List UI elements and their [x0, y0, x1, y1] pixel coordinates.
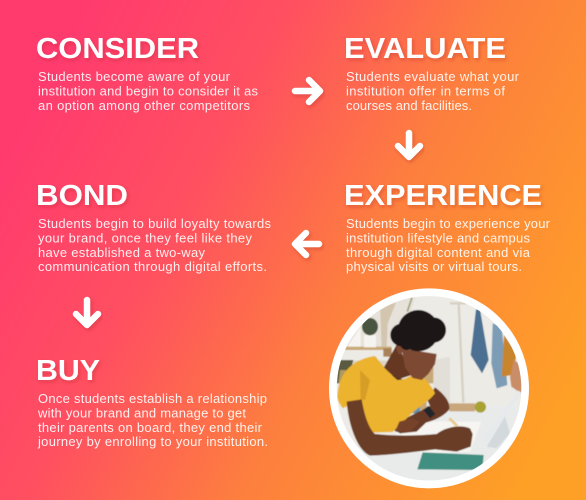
text: bond description: communication through digital efforts.	[38, 259, 267, 274]
text: buy description: journey by enrolling to your institution.	[37, 434, 268, 449]
heading: buy: BUY	[36, 355, 100, 387]
text: consider description: Students become aware of your	[38, 69, 231, 84]
panel: bond	[36, 180, 272, 274]
heading: bond: BOND	[36, 180, 128, 212]
arm	[347, 399, 473, 456]
shirt	[337, 356, 435, 433]
shelf	[352, 360, 388, 368]
desk	[353, 406, 527, 483]
clothes rack	[450, 303, 467, 403]
text: bond description: your brand, once they feel like they	[38, 230, 252, 246]
text: consider description: an option among other competitors	[38, 98, 250, 113]
text: evaluate description: Students evaluate what your	[346, 69, 520, 84]
panel: evaluate	[344, 33, 520, 113]
text: evaluate description	[346, 69, 520, 113]
text: buy description: Once students establish a relationship	[38, 391, 267, 406]
text: consider description	[38, 69, 258, 113]
text: experience description	[346, 216, 551, 274]
text: buy description: their parents on board, they end their	[38, 420, 263, 435]
panel: experience	[344, 180, 551, 274]
heading: evaluate: EVALUATE	[344, 33, 506, 65]
photo: student writing at desk	[329, 288, 529, 488]
hair	[390, 310, 446, 351]
panel: consider	[36, 33, 258, 113]
arrow: evaluate to experience	[398, 133, 420, 157]
arrow: bond to buy	[76, 300, 98, 325]
text: buy description	[37, 391, 268, 449]
text: experience description: through digital content and via	[346, 245, 531, 260]
panel: buy	[36, 355, 268, 449]
arrow: consider to evaluate	[295, 80, 320, 102]
text: buy description: with your brand and manage to get	[37, 406, 246, 420]
heading: consider: CONSIDER	[36, 33, 199, 65]
text: bond description: Students begin to build loyalty towards	[38, 216, 272, 231]
text: evaluate description: institution offer in terms of	[346, 84, 505, 98]
text: experience description: physical visits or virtual tours.	[346, 259, 522, 274]
green book	[417, 452, 484, 470]
text: experience description: Students begin to experience your	[346, 216, 551, 231]
text: evaluate description: courses and facilities.	[346, 98, 472, 113]
text: consider description: institution and begin to consider it as	[38, 84, 258, 98]
neck and head	[384, 343, 412, 379]
notebook	[395, 422, 481, 453]
heading: experience: EXPERIENCE	[344, 180, 542, 212]
text: experience description: institution lifestyle and campus	[346, 230, 530, 246]
arrow: experience to bond	[295, 233, 319, 255]
arm behind	[394, 387, 449, 433]
text: bond description	[38, 216, 272, 274]
tablet	[518, 390, 522, 394]
text: bond description: have established a two-way	[38, 245, 206, 260]
